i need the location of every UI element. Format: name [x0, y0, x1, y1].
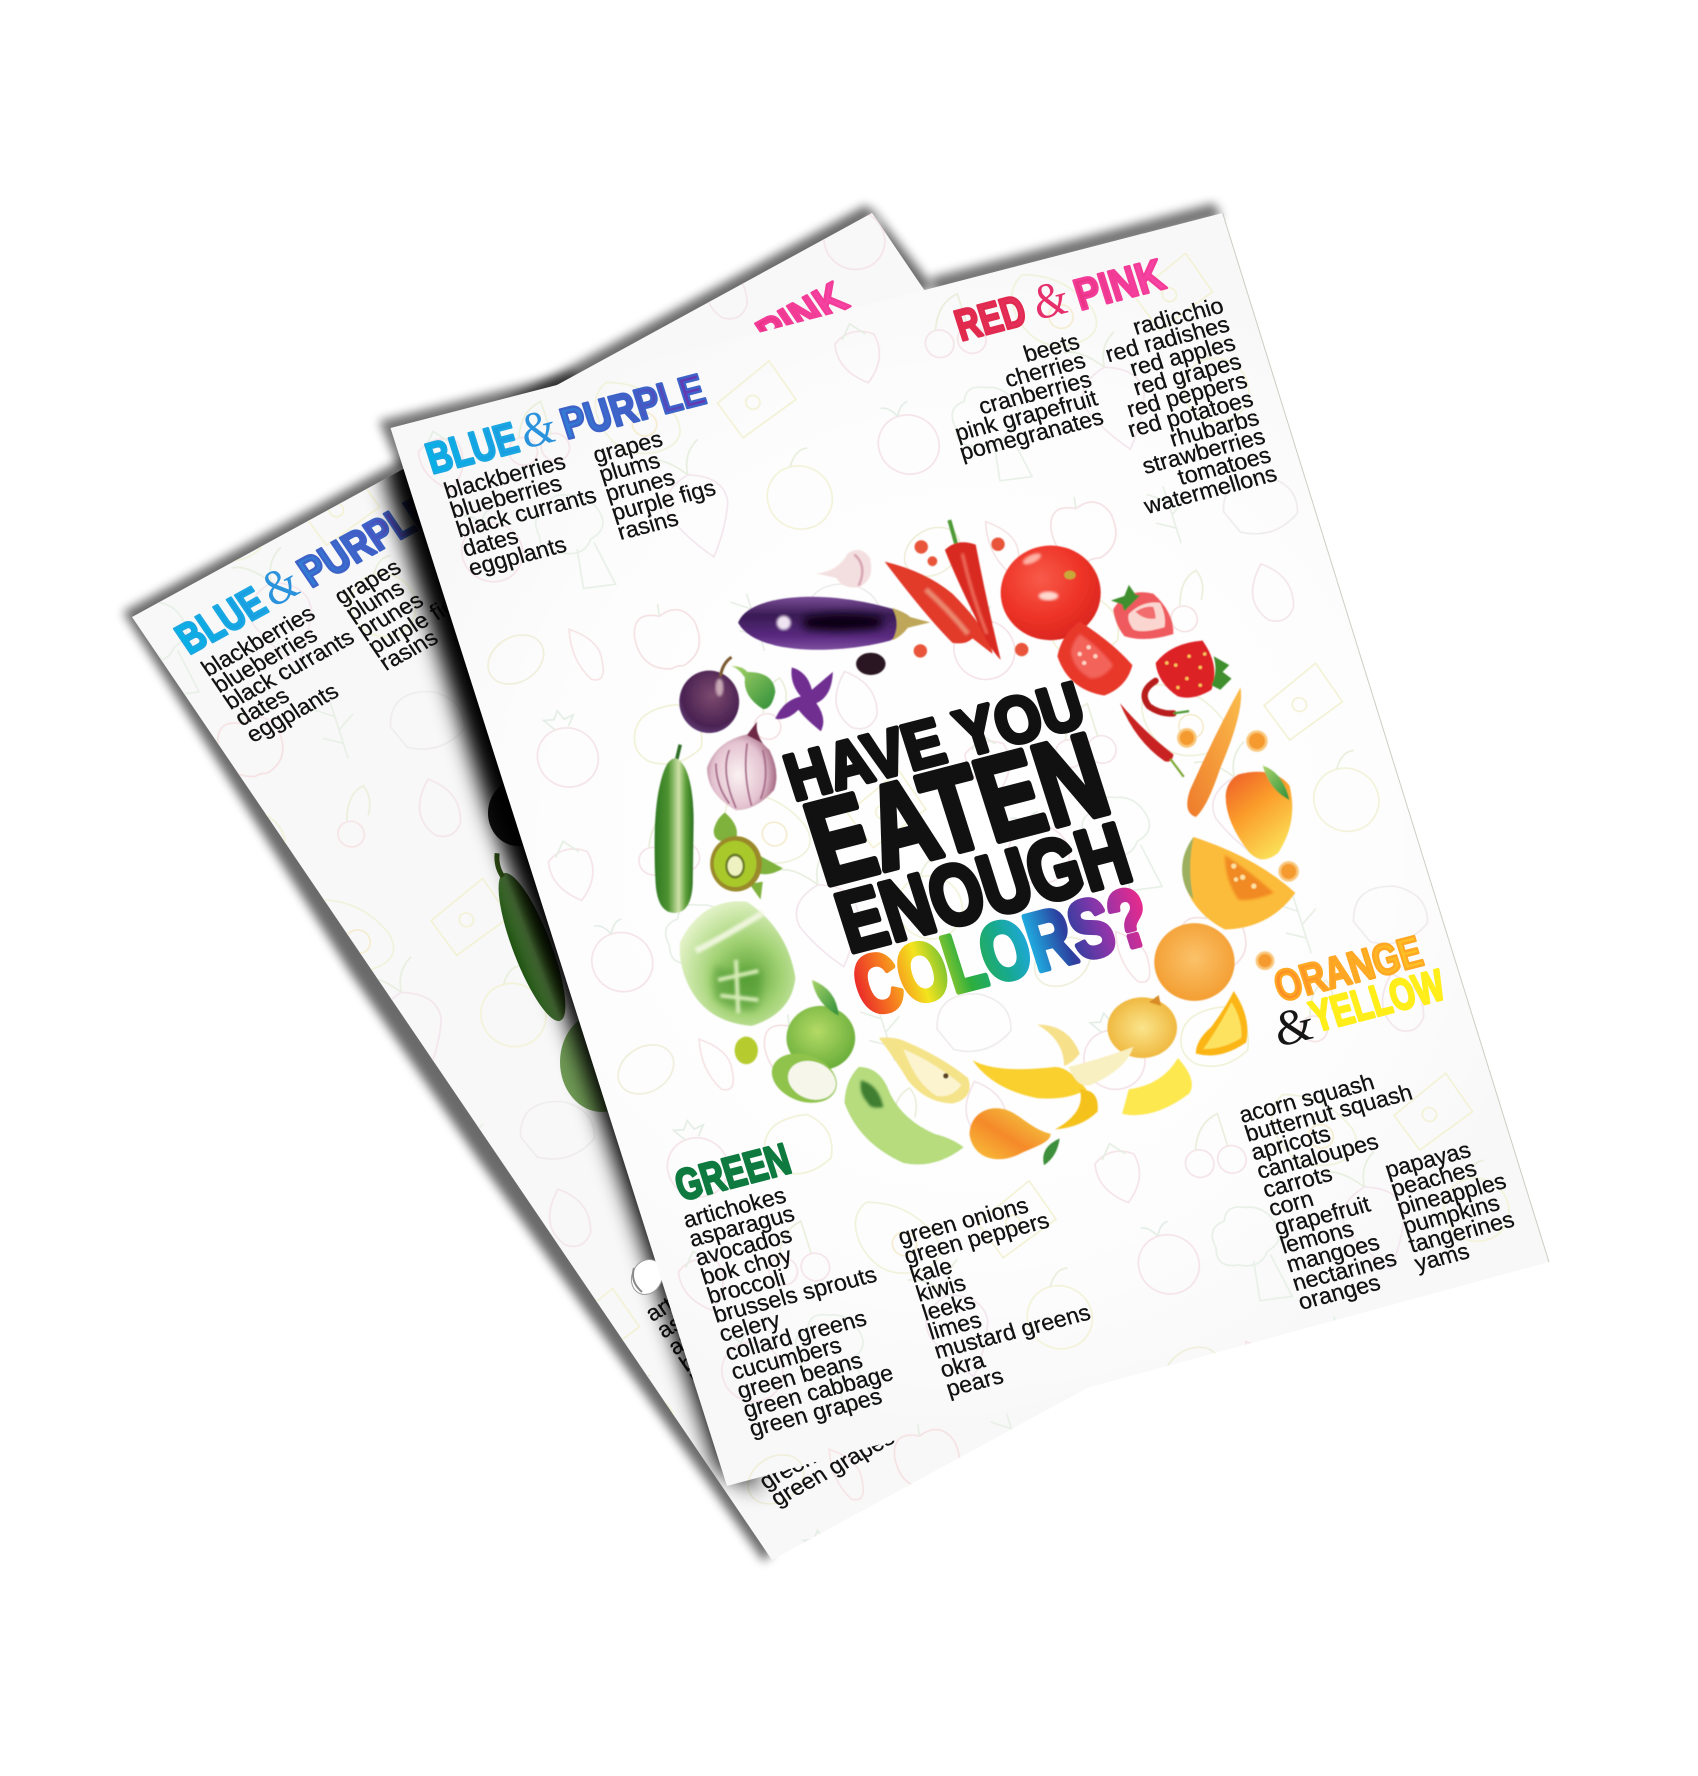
back list: blue and purple, second column: plums — [340, 575, 409, 626]
icon: halved pear — [879, 1037, 970, 1104]
list: orange and yellow, first column: cantaloupes — [1253, 1128, 1381, 1184]
list: red and pink, second column: red peppers — [1123, 367, 1250, 422]
icon: cabbage leaf — [844, 1067, 964, 1164]
list: green, second column: kale — [907, 1252, 955, 1288]
list: blue and purple, second column: purple figs — [608, 474, 719, 526]
list: red and pink, first column: pink grapefruit — [951, 384, 1101, 446]
heading: blue and purple: & — [512, 397, 562, 459]
icon: back cucumber — [478, 847, 578, 1028]
back list: blue and purple, first column: black currants — [219, 624, 359, 714]
list: orange and yellow, second column: peaches — [1388, 1155, 1480, 1201]
heading: red and pink: & — [1025, 269, 1075, 331]
back list: blue and purple, second column: rasins — [374, 624, 443, 675]
binder hole highlight — [626, 1254, 668, 1300]
list: orange and yellow, first column: butternut squash — [1242, 1079, 1415, 1146]
back list: green fragment: green beans — [743, 1394, 869, 1477]
back list: blue and purple, second column: prunes — [352, 587, 428, 642]
list: green, first column: avocados — [692, 1221, 795, 1271]
back heading: pink fragment: PINK — [748, 273, 857, 358]
icon: red onion — [707, 722, 776, 810]
list: green, second column: green peppers — [901, 1207, 1052, 1269]
list: green, first column: brussels sprouts — [710, 1261, 880, 1328]
back heading: pink fragment — [713, 273, 862, 385]
icon: cucumber — [654, 745, 694, 913]
main title — [776, 668, 1161, 1033]
list: red and pink, first column: cranberries — [975, 366, 1094, 419]
title line: eaten: EATEN — [792, 709, 1122, 911]
title line: colors: COLORS? — [843, 871, 1161, 1033]
icon: small red dots — [914, 537, 1028, 658]
list: orange and yellow, second column: papayas — [1382, 1136, 1474, 1183]
back heading: blue and purple: BLUE — [167, 579, 275, 663]
list: green, first column: artichokes — [680, 1182, 789, 1233]
back list: blue and purple, first column: dates — [230, 682, 294, 731]
wreath of fruit and vegetables — [654, 520, 1298, 1165]
list: green, second column: limes — [925, 1306, 985, 1345]
icon: mango — [1226, 766, 1292, 859]
list: red and pink, first column: beets — [1020, 328, 1083, 367]
list: orange and yellow, first column: nectarines — [1289, 1245, 1400, 1296]
back list: green fragment: avocados — [663, 1291, 764, 1360]
back list: blue and purple, second column: purple figs — [363, 586, 471, 659]
front flyer sheet — [390, 213, 1549, 1486]
list: green, second column: mustard greens — [931, 1299, 1093, 1364]
list: red and pink, first column: pomegranates — [956, 403, 1106, 465]
list: orange and yellow, first column: grapefruit — [1271, 1191, 1374, 1240]
icon: back plum in shadow — [488, 780, 548, 846]
list: red and pink, second column: red grapes — [1130, 348, 1244, 400]
list: blue and purple, first column: black currants — [453, 482, 599, 542]
back list: green fragment: celery — [709, 1376, 777, 1427]
list: blue and purple, second column: grapes — [590, 425, 666, 468]
list: green, first column: bok choy — [698, 1242, 795, 1290]
back sheet paper — [132, 213, 1512, 1560]
icon: curved chili — [1145, 681, 1189, 713]
icon: halved strawberry — [1111, 585, 1173, 639]
front sheet paper — [390, 213, 1549, 1486]
icon: tomato — [1001, 546, 1101, 640]
list: blue and purple, first column: eggplants — [465, 531, 570, 581]
list: blue and purple, second column: plums — [596, 447, 663, 487]
heading word: orange: ORANGE — [1268, 927, 1428, 1012]
list: red and pink, second column: strawberries — [1139, 423, 1268, 479]
list: orange and yellow, second column: pineapples — [1394, 1168, 1509, 1220]
list: red and pink, second column: red radishes — [1102, 311, 1232, 367]
list: green, first column: green cabbage — [740, 1359, 896, 1422]
list: blue and purple, first column: blackberries — [441, 448, 569, 504]
back heading: blue and purple — [163, 480, 445, 663]
list: red and pink, second column: rhubarbs — [1166, 404, 1262, 452]
heading: blue and purple: PURPLE — [555, 365, 711, 449]
icon: apricot — [1154, 923, 1235, 1001]
icon: green apple — [786, 980, 855, 1070]
list: orange and yellow, first column: lemons — [1277, 1215, 1357, 1259]
list: red and pink, second column: red potatoes — [1124, 385, 1256, 442]
heading ampersand: & — [1265, 994, 1320, 1057]
list: blue and purple, second column: prunes — [602, 464, 678, 506]
heading: red and pink: PINK — [1068, 250, 1171, 320]
list: red and pink, second column: red apples — [1126, 329, 1238, 381]
back list: green fragment: asparagus — [652, 1270, 760, 1343]
heading: red and pink — [947, 244, 1171, 351]
back flyer sheet — [132, 213, 1512, 1560]
icon: yellow onion — [1107, 995, 1177, 1058]
shadow under the back sheet — [123, 205, 934, 1562]
back list: green fragment: green grapes — [765, 1424, 899, 1511]
icon: halved apple — [765, 1045, 844, 1111]
list: green, first column: collard greens — [722, 1305, 870, 1366]
back heading: blue and purple: & — [248, 554, 310, 617]
back list: green fragment: artichokes — [640, 1254, 747, 1326]
back list: green fragment: brussels sprouts — [697, 1308, 859, 1410]
list: orange and yellow, second column: yams — [1411, 1238, 1472, 1276]
list: red and pink, second column: radicchio — [1130, 292, 1227, 340]
list: green, first column: green beans — [734, 1347, 866, 1404]
back heading: pink fragment: & — [714, 320, 780, 385]
list: orange and yellow, first column: apricots — [1248, 1120, 1333, 1165]
list: green, second column: leeks — [919, 1287, 979, 1326]
list: orange and yellow, second column: tangerines — [1405, 1206, 1517, 1258]
icon: plum leaf — [732, 666, 775, 709]
back list: blue and purple, first column: blueberries — [207, 622, 322, 698]
list: green, second column: kiwis — [913, 1269, 969, 1307]
heading: blue and purple: BLUE — [420, 414, 524, 484]
back list: green fragment: cucumbers — [731, 1385, 845, 1460]
heading: orange and yellow — [1265, 927, 1451, 1057]
icon: small lime — [735, 1037, 758, 1064]
list: red and pink, first column: cherries — [1001, 347, 1088, 392]
list: orange and yellow, first column: mangoes — [1283, 1229, 1383, 1277]
back heading: blue and purple: PURPLE — [289, 486, 445, 597]
icon: plum — [679, 657, 739, 733]
list: orange and yellow, first column: oranges — [1295, 1269, 1383, 1315]
icon: orange wedge — [1196, 991, 1247, 1055]
list: green, first column: asparagus — [686, 1200, 798, 1252]
icon: banana — [973, 1025, 1133, 1129]
icon: pumpkin slice — [1182, 837, 1295, 929]
list: orange and yellow, first column: corn — [1265, 1185, 1316, 1221]
icon: carrot slices — [1178, 729, 1298, 969]
icon: kiwi — [710, 812, 783, 900]
list: green, first column: green grapes — [746, 1383, 885, 1441]
title line: enough: ENOUGH — [826, 806, 1141, 971]
list: green, first column: cucumbers — [728, 1332, 845, 1385]
back list: green fragment: bok choy — [674, 1311, 770, 1377]
shadow under the front sheet — [379, 203, 1222, 470]
icon: sliced red pepper — [885, 562, 993, 654]
list: green, second column: pears — [943, 1362, 1006, 1402]
back list: blue and purple, first column: blackberries — [196, 600, 320, 681]
icon: strawberry — [1156, 641, 1231, 698]
list: green, second column: okra — [937, 1347, 988, 1383]
icon: cabbage — [680, 901, 795, 1026]
back list: blue and purple, second column: grapes — [329, 554, 405, 609]
icon: back cabbage edge — [560, 1012, 644, 1112]
icon: red chili pepper — [945, 520, 1001, 660]
icon: pear — [969, 1108, 1060, 1165]
back list: green fragment: broccoli — [686, 1334, 770, 1393]
heading: blue and purple — [418, 359, 711, 484]
icon: garlic — [816, 550, 871, 587]
list: blue and purple, first column: blueberries — [447, 470, 565, 523]
heading word: yellow: YELLOW — [1304, 961, 1451, 1042]
list: green, first column: broccoli — [704, 1264, 788, 1309]
icon: long chili — [1120, 703, 1184, 777]
heading: red and pink: RED — [949, 286, 1032, 351]
icon: eggplant — [738, 597, 930, 650]
back list: green fragment: green cabbage — [754, 1399, 903, 1494]
back list: green fragment: collard greens — [720, 1353, 861, 1444]
icon: small dark berry — [856, 653, 886, 675]
icon: purple basil — [775, 667, 833, 731]
icon: carrot — [1187, 687, 1241, 817]
shadow cast by the front sheet on the back sheet — [385, 420, 760, 1490]
list: green, second column: green onions — [895, 1192, 1031, 1250]
back list: blue and purple, first column: eggplants — [241, 678, 343, 747]
list: orange and yellow, first column: acorn squash — [1236, 1068, 1377, 1128]
list: orange and yellow, first column: carrots — [1259, 1160, 1335, 1203]
icon: yellow squash slice — [1122, 1058, 1192, 1115]
list: red and pink, second column: watermellons — [1140, 460, 1280, 519]
list: red and pink, second column: tomatoes — [1174, 441, 1274, 490]
title line: have you: HAVE YOU — [776, 668, 1093, 814]
list: orange and yellow, second column: pumpkins — [1399, 1189, 1503, 1239]
heading: green: GREEN — [669, 1135, 796, 1211]
list: blue and purple, second column: rasins — [614, 505, 681, 545]
list: green, first column: celery — [716, 1306, 784, 1347]
list: blue and purple, first column: dates — [459, 523, 521, 562]
icon: tomato wedge — [1057, 621, 1132, 696]
